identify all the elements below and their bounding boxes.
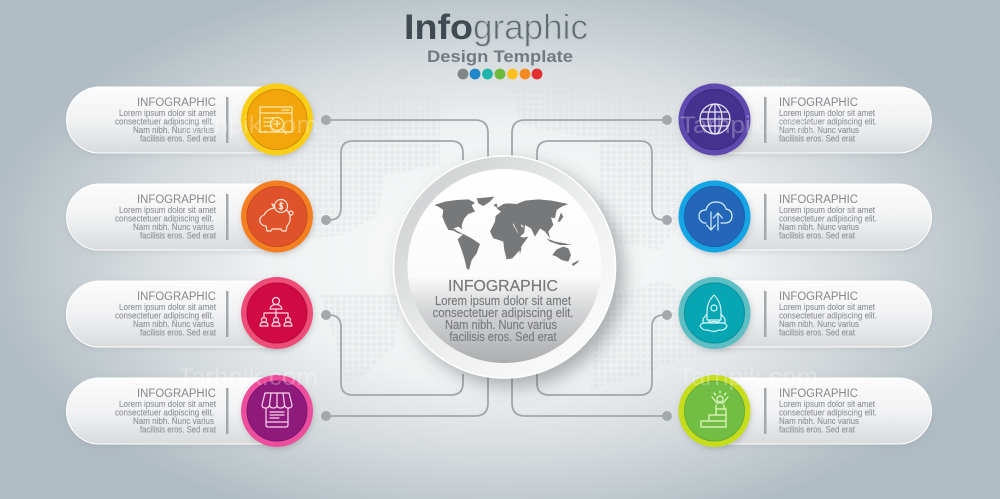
panel: right 4 [678,375,932,447]
panel: left 2: INFOGRAPHIC [137,194,216,206]
panel: left 3: INFOGRAPHIC [137,291,216,303]
panel: right 4: consectetuer adipiscing elit. [779,408,877,418]
panel: left 4 [66,375,313,447]
watermarks: Tarhpik.com [178,364,318,391]
panel: left 4: Lorem ipsum dolor sit amet [119,399,217,409]
panel: left 1: Nam nibh. Nunc varius [133,125,215,135]
panel: right 2: consectetuer adipiscing elit. [779,214,877,224]
central circle: facilisis eros. Sed erat [450,330,557,344]
panel: left 1: facilisis eros. Sed erat [140,134,216,144]
panel: left 2: Nam nibh. Nunc varius [133,222,215,232]
connector lines [326,120,667,416]
panel: right 2: Lorem ipsum dolor sit amet [779,205,876,215]
panel: left 4: Nam nibh. Nunc varius [133,416,215,426]
title: Design Template [427,47,573,66]
watermarks: Tarhpik.com [680,112,820,139]
central circle: INFOGRAPHIC [448,278,558,295]
panel: left 2 [66,180,313,252]
panel: right 2 [678,180,932,252]
panel: right 1: facilisis eros. Sed erat [779,134,855,144]
panel: right 3 [678,277,932,349]
panel: left 3: facilisis eros. Sed erat [140,328,216,338]
watermarks [178,112,820,391]
title: graphic [473,8,588,47]
panel: left 4: facilisis eros. Sed erat [140,424,216,434]
panel: right 3: Lorem ipsum dolor sit amet [779,302,876,312]
panel: left 1: INFOGRAPHIC [137,97,216,109]
panel: right 1: Nam nibh. Nunc varius [779,125,860,135]
title: Info [404,8,473,47]
panel: right 3: Nam nibh. Nunc varius [779,319,860,329]
panel: left 4: consectetuer adipiscing elit. [115,408,214,418]
central circle: Nam nibh. Nunc varius [445,318,557,332]
panel: right 1: Lorem ipsum dolor sit amet [779,108,876,118]
panel: right 4: facilisis eros. Sed erat [779,424,855,434]
panel: left 3: Lorem ipsum dolor sit amet [119,302,217,312]
panel: right 1: consectetuer adipiscing elit. [779,116,877,126]
panel: right 3: facilisis eros. Sed erat [779,328,855,338]
panel: right 3: INFOGRAPHIC [779,291,858,303]
panel: left 4: INFOGRAPHIC [137,388,216,400]
dotted world map backdrop [240,78,800,390]
panel: right 3: consectetuer adipiscing elit. [779,310,877,320]
panel: right 2: facilisis eros. Sed erat [779,230,855,240]
panel: right 1 [678,84,932,156]
panel: left 2: facilisis eros. Sed erat [140,230,216,240]
colour dots row [458,69,542,79]
watermarks: Tarhpik.com [678,364,818,391]
panel: right 2: INFOGRAPHIC [779,194,858,206]
panel: left 3: consectetuer adipiscing elit. [115,310,214,320]
panel: left 1: consectetuer adipiscing elit. [115,116,214,126]
watermarks: Tarhpik.com [178,112,318,139]
panel: left 1 [66,84,313,156]
title [404,8,588,66]
panel: right 4: INFOGRAPHIC [779,388,858,400]
central circle: consectetuer adipiscing elit. [432,306,574,320]
panel: right 2: Nam nibh. Nunc varius [779,222,860,232]
panel: right 4: Nam nibh. Nunc varius [779,416,860,426]
panel: left 2: consectetuer adipiscing elit. [115,214,214,224]
panel: right 4: Lorem ipsum dolor sit amet [779,399,876,409]
connector end dots [321,115,672,421]
panel: left 1: Lorem ipsum dolor sit amet [119,108,217,118]
panel: left 2: Lorem ipsum dolor sit amet [119,205,217,215]
central circle: Lorem ipsum dolor sit amet [435,294,571,308]
world map [434,197,579,270]
panel: left 3: Nam nibh. Nunc varius [133,319,215,329]
central circle [394,156,616,378]
panel: right 1: INFOGRAPHIC [779,97,858,109]
panel: left 3 [66,277,313,349]
